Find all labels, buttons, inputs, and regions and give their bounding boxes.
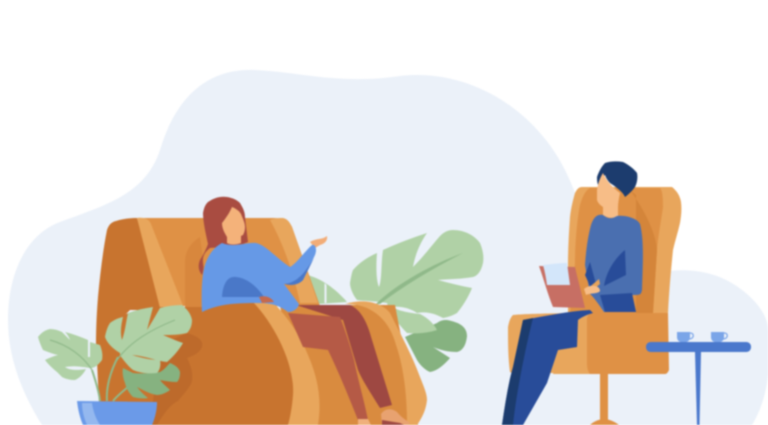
pot	[77, 401, 157, 425]
feet	[381, 409, 410, 425]
trouser shadow	[502, 318, 533, 425]
hand on armrest	[259, 296, 274, 303]
right leaf	[105, 305, 192, 373]
seat shadow	[558, 345, 588, 354]
back small leaf	[307, 275, 347, 304]
armchair: patient	[96, 218, 427, 425]
left leaf vein	[50, 340, 92, 370]
seat	[280, 305, 418, 425]
hair	[199, 197, 248, 275]
plant: large back monstera	[307, 230, 483, 372]
therapist	[502, 161, 643, 425]
sweater shadow	[604, 250, 626, 286]
pot highlight	[82, 403, 100, 425]
chair stem and base	[600, 374, 608, 420]
chair back inner	[570, 188, 663, 313]
main leaf	[350, 230, 483, 333]
wing strip	[137, 218, 184, 308]
left leaf	[38, 329, 102, 380]
front arm	[96, 302, 293, 425]
face and neck	[222, 207, 245, 244]
seat	[508, 313, 600, 373]
shadow behind woman	[185, 237, 210, 308]
chair back shadow	[630, 190, 657, 313]
sweater	[585, 215, 643, 312]
far leg	[296, 305, 392, 408]
hair	[597, 161, 637, 197]
sweater shadow	[222, 277, 264, 297]
leaf vein	[376, 253, 463, 304]
notebook page	[543, 263, 570, 285]
woman: patient	[199, 197, 410, 425]
chair back	[568, 187, 681, 313]
right leaf vein	[117, 320, 175, 360]
side table	[646, 332, 751, 425]
arm strip	[553, 313, 592, 374]
left wing	[96, 218, 165, 345]
cups	[677, 332, 690, 342]
stems	[92, 357, 128, 401]
chair back	[140, 218, 320, 306]
hand	[310, 236, 327, 248]
dark leaf	[123, 363, 180, 398]
right arm	[345, 301, 427, 425]
dark leaf	[405, 320, 467, 372]
potted plant	[38, 305, 192, 425]
plant shadow on chair	[150, 333, 202, 425]
table top	[646, 342, 751, 352]
back right strip	[270, 218, 318, 303]
armchair: therapist	[508, 187, 681, 425]
face and neck	[597, 173, 620, 218]
table leg	[695, 352, 701, 425]
sweater	[202, 243, 316, 312]
near leg	[288, 313, 368, 420]
arm front	[587, 313, 669, 374]
notebook	[539, 266, 585, 308]
front arm strip	[250, 302, 320, 425]
trousers	[502, 310, 593, 425]
hand and pen	[586, 279, 600, 294]
